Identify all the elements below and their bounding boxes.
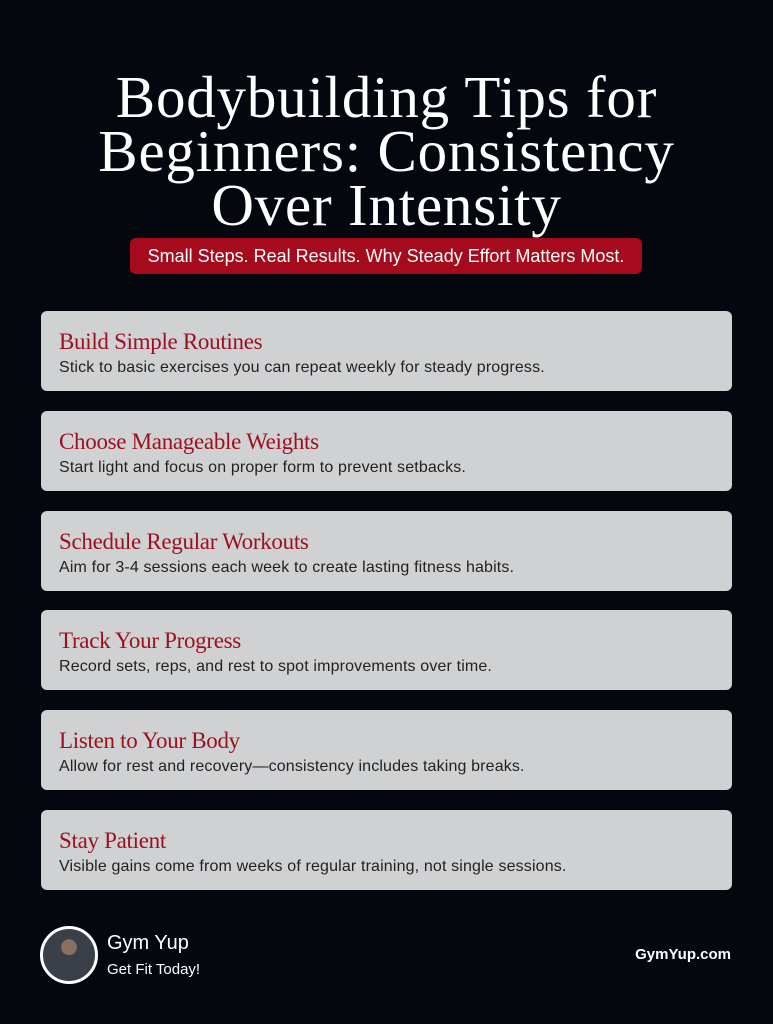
card: track your progress xyxy=(41,610,732,690)
card: listen to your body xyxy=(41,710,732,790)
title: Over Intensity xyxy=(211,172,562,238)
card: track your progress: Record sets, reps, and rest to spot improvements over time. xyxy=(59,658,492,675)
card: choose manageable weights: Start light and focus on proper form to prevent setbacks. xyxy=(59,459,466,476)
card: schedule regular workouts: Aim for 3-4 sessions each week to create lasting fitness habits. xyxy=(59,559,514,576)
brand name: Gym Yup xyxy=(107,932,189,954)
card: listen to your body: Listen to Your Body xyxy=(59,728,240,753)
card: track your progress: Track Your Progress xyxy=(59,628,241,653)
card: schedule regular workouts xyxy=(41,511,732,591)
card: build simple routines: Stick to basic exercises you can repeat weekly for steady progress. xyxy=(59,359,545,376)
card: stay patient: Stay Patient xyxy=(59,828,166,853)
card: stay patient xyxy=(41,810,732,890)
card: listen to your body: Allow for rest and recovery—consistency includes taking breaks. xyxy=(59,758,525,775)
icon: avatar xyxy=(40,926,98,984)
card: build simple routines xyxy=(41,311,732,391)
website: GymYup.com xyxy=(635,946,731,963)
card: build simple routines: Build Simple Routines xyxy=(59,329,262,354)
title: Beginners: Consistency xyxy=(98,118,675,184)
tagline: Get Fit Today! xyxy=(107,961,200,978)
title: Bodybuilding Tips for xyxy=(116,64,657,130)
card: choose manageable weights xyxy=(41,411,732,491)
card: schedule regular workouts: Schedule Regular Workouts xyxy=(59,529,309,554)
subtitle badge: Small Steps. Real Results. Why Steady Effort Matters Most. xyxy=(148,246,624,266)
card: stay patient: Visible gains come from weeks of regular training, not single sessions. xyxy=(59,858,566,875)
subtitle badge xyxy=(130,238,642,274)
card: choose manageable weights: Choose Manageable Weights xyxy=(59,429,319,454)
title xyxy=(98,64,675,238)
